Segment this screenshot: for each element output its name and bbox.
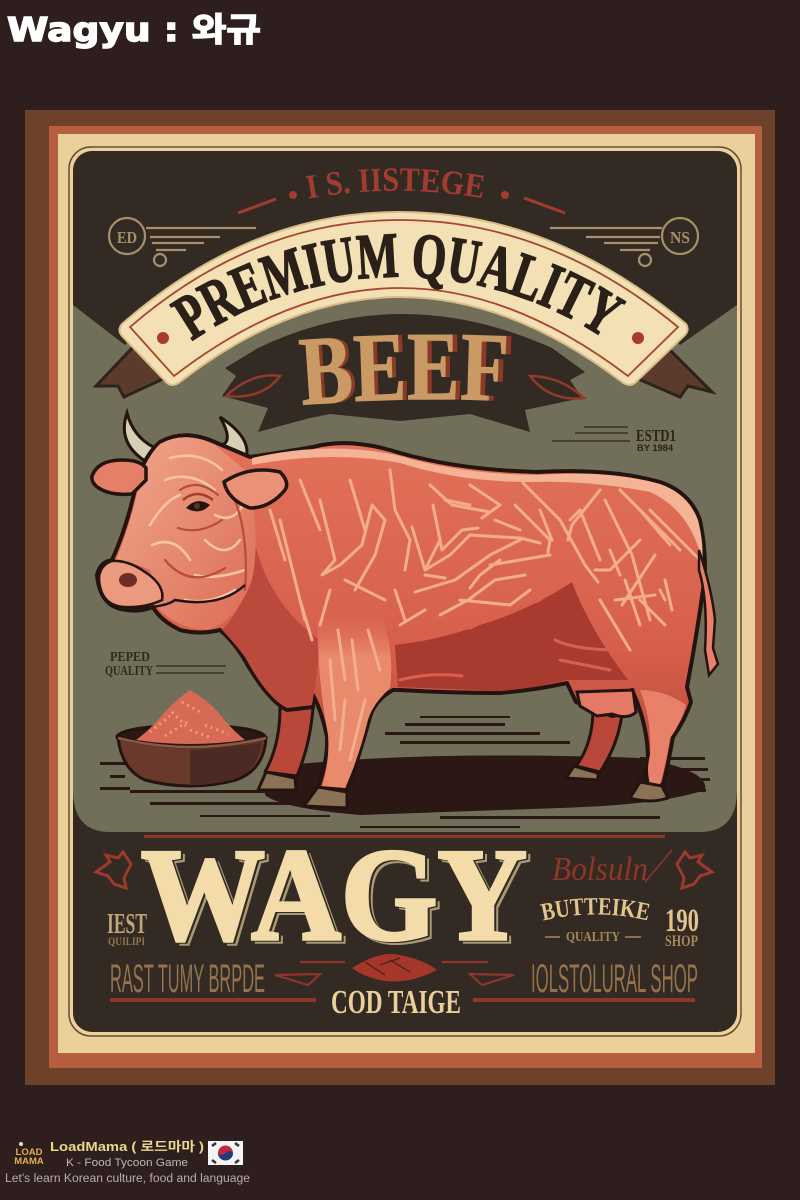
tail <box>699 550 718 675</box>
eye <box>183 494 213 511</box>
belly shadow <box>395 582 628 691</box>
red rules bottom <box>110 998 695 1002</box>
title: Wagyu : 와규 <box>7 10 261 49</box>
label: ESTD: ESTD1 <box>636 426 676 445</box>
emblem: NS scroll <box>550 218 698 266</box>
emblem: ED scroll <box>109 218 256 266</box>
label: BUTTEIKE <box>540 898 650 945</box>
ear right <box>224 470 287 508</box>
label: peped quality: PEPED <box>110 650 150 665</box>
olive field <box>73 270 737 832</box>
far legs <box>258 708 622 790</box>
poster panel <box>73 151 737 1032</box>
label: IEST: IEST <box>107 908 147 940</box>
label: BUTTEIKE: QUALITY <box>566 930 620 945</box>
front leg highlight <box>318 600 391 788</box>
ribbon: banner tails <box>96 345 712 397</box>
script scrawl: Bolsuln <box>552 851 648 888</box>
footer brand name: LoadMama ( 로드마마 ) <box>50 1139 204 1154</box>
emblem: NS scroll: NS <box>670 228 690 247</box>
label: IEST <box>107 908 147 948</box>
cow illustration <box>92 413 718 808</box>
brisket shadow <box>222 520 320 708</box>
heading: BEEF <box>298 334 512 406</box>
leaf icon right <box>677 852 712 888</box>
label: peped quality <box>105 650 226 679</box>
text: cod taige: COD TAIGE <box>331 984 461 1021</box>
marbling <box>270 470 700 760</box>
text: RAST TUMY BRPDE <box>110 957 265 1001</box>
horn right <box>215 417 247 467</box>
banner: premium quality: PREMIUM QUALITY <box>169 234 627 342</box>
horn left <box>124 413 160 464</box>
mouth <box>130 585 245 608</box>
banner: premium quality <box>118 211 689 386</box>
footer logo <box>14 1142 44 1167</box>
heading: BEEF: BEEF <box>298 334 506 406</box>
label: 190 shop: SHOP <box>665 933 698 950</box>
poster frame <box>25 110 775 1085</box>
meat icon <box>275 954 514 985</box>
back highlight <box>252 448 702 560</box>
body <box>97 435 705 790</box>
heading: WAGY: WAGY <box>143 822 529 969</box>
heading: top small arc text <box>238 168 566 214</box>
footer flag <box>208 1141 243 1165</box>
bowl of minced beef <box>117 690 266 786</box>
heading: WAGY: WAGY <box>145 824 531 971</box>
footer logo: LOAD <box>16 1147 43 1158</box>
heading: top small arc text: I S. IISTEGE <box>305 168 484 198</box>
dark ribbon behind BEEF <box>222 314 585 432</box>
label: ESTD <box>552 426 676 453</box>
label: BUTTEIKE: BUTTEIKE <box>540 898 650 920</box>
footer logo: MAMA <box>14 1156 44 1167</box>
leaf: beef left <box>226 375 280 397</box>
label: 190 shop: 190 <box>665 903 699 939</box>
nostril <box>119 573 137 587</box>
heading: BEEF: BEEF <box>302 334 512 405</box>
red rule top <box>144 835 665 838</box>
footer tagline: K - Food Tycoon Game <box>66 1157 188 1169</box>
ground shadow <box>100 716 710 828</box>
label: 190 shop <box>665 903 699 950</box>
near hooves <box>304 782 668 808</box>
face lines <box>150 456 245 601</box>
emblem: ED scroll: ED <box>117 228 137 247</box>
belly highlight streaks <box>400 600 620 680</box>
ear left <box>92 460 146 494</box>
muzzle <box>99 561 162 607</box>
leaf icon left <box>96 852 131 888</box>
footer caption: Let's learn Korean culture, food and language <box>5 1173 250 1185</box>
head shading <box>116 437 256 630</box>
heading: WAGY: WAGY <box>141 821 527 968</box>
leaf: beef right <box>530 376 584 399</box>
udder <box>577 690 636 717</box>
label: IEST: QUILIPI <box>108 934 145 948</box>
label: peped quality: QUALITY <box>105 664 153 679</box>
hind leg highlight <box>640 690 686 785</box>
label: ESTD: BY 1984 <box>637 443 673 453</box>
